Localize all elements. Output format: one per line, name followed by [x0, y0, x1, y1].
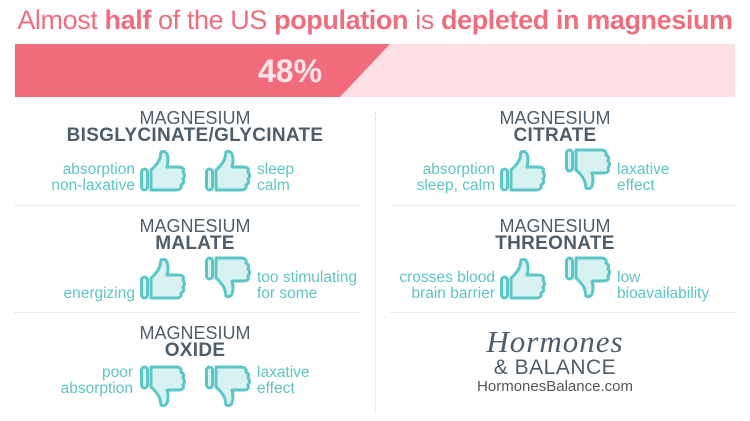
heading — [499, 108, 610, 146]
progress bar 48% — [15, 44, 735, 97]
heading: OXIDE — [165, 340, 225, 361]
icon: thumb down — [205, 366, 251, 407]
pros text: sleep, calm — [417, 177, 495, 194]
panel: citrate — [417, 108, 670, 194]
heading: BISGLYCINATE/GLYCINATE — [67, 125, 323, 146]
heading: MAGNESIUM — [139, 108, 250, 128]
icon: thumb up — [205, 150, 251, 192]
icon: thumb down — [205, 256, 251, 298]
heading: MALATE — [155, 233, 235, 254]
logo: HormonesBalance.com — [477, 378, 633, 395]
heading: MAGNESIUM — [139, 323, 250, 343]
icon: thumb up — [140, 150, 186, 192]
cons text — [617, 269, 710, 302]
heading — [67, 108, 323, 146]
panel: oxide — [61, 323, 310, 407]
heading — [139, 216, 250, 254]
pros text: calm — [257, 177, 290, 194]
panel: threonate — [399, 216, 710, 302]
icon: thumb up — [500, 258, 546, 300]
pros text — [51, 161, 135, 194]
pros text — [399, 269, 495, 302]
pros text: absorption — [63, 161, 135, 178]
pros text: absorption — [423, 161, 495, 178]
heading: MAGNESIUM — [139, 216, 250, 236]
icon: thumb down — [140, 366, 186, 407]
cons text: low — [617, 269, 640, 286]
logo: Hormones — [486, 324, 624, 359]
logo: & BALANCE — [494, 356, 616, 379]
cons text: too stimulating — [257, 269, 357, 286]
cons text — [257, 269, 357, 302]
heading: THREONATE — [495, 233, 615, 254]
icon: thumb up — [500, 150, 546, 192]
cons text: laxative — [617, 161, 670, 178]
cons text: poor — [102, 364, 133, 381]
panel: malate — [63, 216, 357, 302]
percent label: 48% — [258, 53, 322, 89]
cons text: laxative — [257, 364, 310, 381]
cons text: for some — [257, 285, 317, 302]
heading — [495, 216, 615, 254]
title: Almost half of the US population is depleted in magnesium — [17, 5, 733, 35]
logo — [477, 324, 633, 395]
pros text: energizing — [63, 285, 135, 302]
heading: MAGNESIUM — [499, 108, 610, 128]
heading — [139, 323, 250, 361]
pros text: crosses blood — [399, 269, 495, 286]
heading: CITRATE — [513, 125, 597, 146]
pros text — [417, 161, 495, 194]
cons text — [61, 364, 133, 397]
pros text: non-laxative — [51, 177, 135, 194]
cons text: effect — [617, 177, 655, 194]
panel: bisglycinate — [51, 108, 323, 194]
pros text: brain barrier — [411, 285, 495, 302]
cons text: effect — [257, 380, 295, 397]
heading: MAGNESIUM — [499, 216, 610, 236]
icon: thumb down — [565, 148, 611, 190]
icon: thumb up — [140, 258, 186, 300]
cons text: absorption — [61, 380, 133, 397]
pros text — [257, 161, 294, 194]
icon: thumb down — [565, 256, 611, 298]
pros text: sleep — [257, 161, 294, 178]
cons text — [257, 364, 310, 397]
cons text — [617, 161, 670, 194]
cons text: bioavailability — [617, 285, 709, 302]
